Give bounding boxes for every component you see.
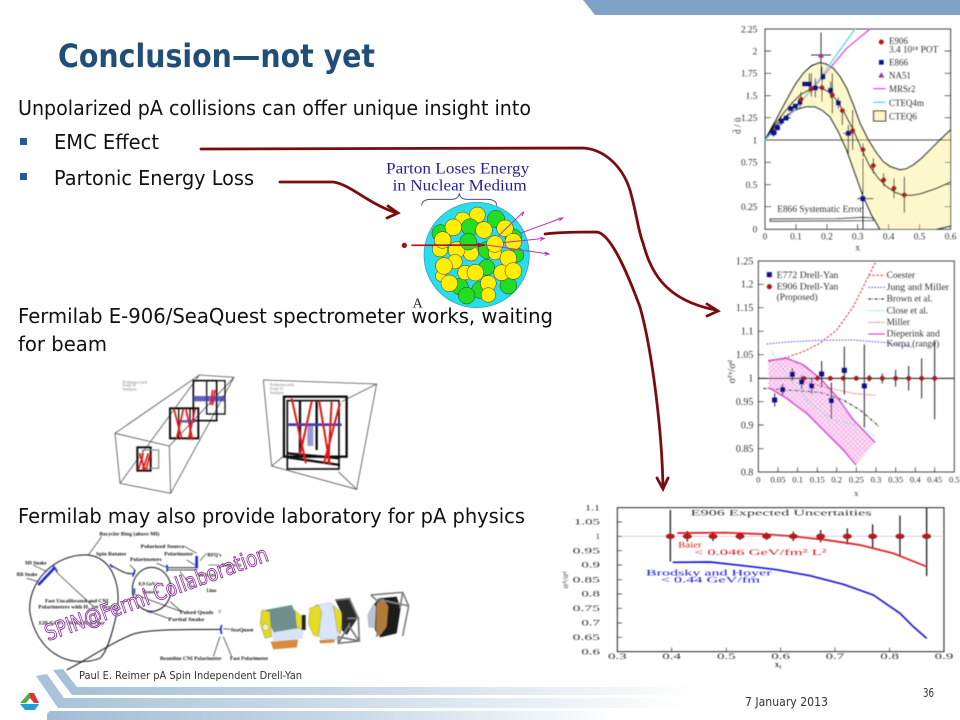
schematic: polarized beam complex: Spin Rotator <box>197 573 217 579</box>
chart: E906 expected uncertainties: Baier <box>678 540 702 550</box>
illustration: parton energy loss nucleus: Parton Loses Energy <box>386 160 529 177</box>
chart: sigma Fe over sigma d: 0.15 <box>810 474 825 484</box>
chart: sigma Fe over sigma d: /σ <box>727 363 738 372</box>
chart: E906 expected uncertainties: d <box>563 571 568 574</box>
chart: sigma Fe over sigma d: x <box>854 488 859 498</box>
chart: sigma Fe over sigma d: 0.45 <box>927 474 942 484</box>
chart: sigma Fe over sigma d: Dieperink and <box>887 330 940 340</box>
schematic: polarized beam complex: Polarimeters <box>130 557 162 563</box>
chart: E906 expected uncertainties: < 0.44 GeV/fm <box>661 574 760 584</box>
chart: d-bar over u-bar ratio: 0.5 <box>914 232 926 242</box>
chart: E906 expected uncertainties: 0.65 <box>573 632 600 642</box>
text block: SeaQuest spectrometer <box>18 304 553 356</box>
chart: sigma Fe over sigma d: (Proposed) <box>777 292 818 303</box>
schematic: polarized beam complex: SeaQuest <box>231 627 253 633</box>
schematic: polarized beam complex: RFQ's <box>207 552 222 558</box>
chart: sigma Fe over sigma d: 1.15 <box>736 303 753 314</box>
footer presenter note: Paul E. Reimer pA Spin Independent Drell-Yan <box>79 669 302 682</box>
schematic: polarized beam complex: 120 GeV/c Main Injector <box>38 620 106 626</box>
chart: E906 expected uncertainties: < 0.046 GeV/fm² L² <box>694 547 827 557</box>
chart: sigma Fe over sigma d: 0.35 <box>888 474 903 484</box>
chart: E906 expected uncertainties: 1.05 <box>574 517 600 527</box>
chart: E906 expected uncertainties: /σ <box>561 573 570 580</box>
chart: sigma Fe over sigma d: 1.05 <box>736 350 753 361</box>
schematic: polarized beam complex: Pulsed Quads <box>180 610 214 616</box>
schematic: polarized beam complex: Recycler Ring (above MI) <box>99 531 159 538</box>
chart: E906 expected uncertainties: 0.95 <box>573 545 600 555</box>
illustration: spectrometer detector views: Event 10 <box>123 384 136 388</box>
chart: E906 expected uncertainties: 0.6 <box>581 646 601 656</box>
title: Conclusion—not yet <box>58 37 375 75</box>
chart: sigma Fe over sigma d: σ <box>727 378 738 383</box>
chart: sigma Fe over sigma d: 0.9 <box>741 420 753 431</box>
chart: sigma Fe over sigma d: 0.4 <box>910 474 921 484</box>
arrow: nucleus to energy loss chart <box>545 232 668 489</box>
chart: sigma Fe over sigma d: Coester <box>887 271 916 281</box>
chart: E906 expected uncertainties: 1 <box>596 531 600 541</box>
chart: sigma Fe over sigma d: Fe <box>727 371 734 378</box>
footer date: 7 January 2013 <box>745 695 828 709</box>
footer bars <box>36 669 700 720</box>
chart: sigma Fe over sigma d: 0.85 <box>736 444 753 455</box>
chart: sigma Fe over sigma d: 1 <box>748 374 753 385</box>
chart: sigma Fe over sigma d: 0.1 <box>792 474 803 484</box>
chart: E906 expected uncertainties: 0.7 <box>581 618 601 628</box>
text block: pA collisions <box>18 96 531 190</box>
illustration: parton energy loss nucleus <box>386 160 563 311</box>
schematic: polarized beam complex: 8.9 GeV/c <box>139 582 160 588</box>
chart: E906 expected uncertainties: 1.1 <box>585 502 600 512</box>
chart: sigma Fe over sigma d: 1.1 <box>741 327 753 338</box>
chart: sigma Fe over sigma d: 0.05 <box>770 474 786 484</box>
chart: d-bar over u-bar ratio: 1.25 <box>741 114 758 124</box>
chart: d-bar over u-bar ratio: NA51 <box>889 71 911 81</box>
chart: sigma Fe over sigma d: E906 Drell-Yan <box>777 283 839 293</box>
chart: d-bar over u-bar ratio: CTEQ6 <box>889 111 917 121</box>
chart: d-bar over u-bar ratio: 0.4 <box>883 232 895 242</box>
chart: E906 expected uncertainties: 0.3 <box>608 651 627 661</box>
schematic: polarized beam complex: ? <box>218 609 221 615</box>
chart: d-bar over u-bar ratio: CTEQ4m <box>889 98 924 108</box>
schematic: polarized beam complex: MI Snake <box>25 560 47 566</box>
chart: sigma Fe over sigma d: Close et al. <box>887 306 928 316</box>
schematic: polarized beam complex: Beamline CNI Polarimeter <box>160 656 222 662</box>
chart: sigma Fe over sigma d: Korpa (range) <box>887 339 939 350</box>
arrow: EMC effect to nuclear ratio chart <box>201 148 718 316</box>
chart: d-bar over u-bar ratio: 0 <box>763 232 768 242</box>
arrow: partonic energy loss to nucleus <box>280 182 398 218</box>
chart: d-bar over u-bar ratio: 0 <box>753 226 758 236</box>
text block: pA physics laboratory: Fermilab may also provide laboratory for pA physics <box>18 504 525 528</box>
chart: E906 expected uncertainties <box>561 502 953 670</box>
icon: Argonne logo <box>20 693 39 710</box>
text block: pA collisions: EMC Effect <box>54 130 159 154</box>
chart: d-bar over u-bar ratio: 0.2 <box>821 232 833 242</box>
chart: d-bar over u-bar ratio: 0.1 <box>790 232 802 242</box>
schematic: polarized beam complex: Partial Snake <box>168 617 205 623</box>
chart: sigma Fe over sigma d: 1.2 <box>741 280 753 291</box>
illustration: spectrometer detector views <box>115 375 377 493</box>
schematic: polarized beam complex: Sources <box>222 562 242 568</box>
illustration: parton energy loss nucleus: A <box>413 296 423 311</box>
chart: sigma Fe over sigma d <box>727 256 960 498</box>
chart: d-bar over u-bar ratio <box>732 25 957 254</box>
schematic: polarized beam complex <box>17 531 269 670</box>
chart: E906 expected uncertainties: E906 Expected Uncertaities <box>691 508 873 518</box>
schematic: polarized beam complex: RR Snake <box>17 572 38 578</box>
chart: E906 expected uncertainties: 0.4 <box>662 651 682 661</box>
illustration: spectrometer detector views: Event 10 <box>270 387 283 391</box>
chart: E906 expected uncertainties: 1 <box>779 665 782 670</box>
text block: pA collisions: Partonic Energy Loss <box>54 166 254 190</box>
chart: sigma Fe over sigma d: 0.5 <box>949 474 960 484</box>
illustration: spectrometer detector views: SeaQuest <box>270 391 284 395</box>
chart: d-bar over u-bar ratio: E906 <box>889 36 908 46</box>
schematic: polarized beam complex: Polarized Source <box>141 544 185 550</box>
chart: sigma Fe over sigma d: E772 Drell-Yan <box>777 271 839 281</box>
callout: SPIN@Fermi Collaboration: SPIN@Fermi Collaboration <box>42 542 272 647</box>
illustration: spectrometer detector views: SeaQuest <box>123 388 136 392</box>
chart: E906 expected uncertainties: 0.9 <box>581 560 600 570</box>
illustration: SeaQuest magnets <box>260 592 409 649</box>
text block: SeaQuest spectrometer: for beam <box>18 332 107 356</box>
chart: sigma Fe over sigma d: 0.25 <box>849 474 864 484</box>
chart: E906 expected uncertainties: A <box>563 580 568 584</box>
chart: sigma Fe over sigma d: 0.3 <box>871 474 881 484</box>
chart: sigma Fe over sigma d: d <box>727 359 734 363</box>
text block: pA collisions: Unpolarized pA collisions can offer unique insight into <box>18 96 531 120</box>
chart: d-bar over u-bar ratio: 0.5 <box>746 181 758 191</box>
chart: E906 expected uncertainties: σ <box>561 584 570 588</box>
schematic: polarized beam complex: Linac <box>207 588 217 594</box>
chart: d-bar over u-bar ratio: 0.25 <box>741 203 758 213</box>
illustration: spectrometer detector views: Production track <box>123 380 147 384</box>
chart: E906 expected uncertainties: 0.7 <box>826 651 845 661</box>
chart: E906 expected uncertainties: 0.8 <box>880 651 899 661</box>
chart: d-bar over u-bar ratio: MRSr2 <box>889 84 915 94</box>
chart: d-bar over u-bar ratio: 1 <box>753 136 758 146</box>
chart: E906 expected uncertainties: 0.85 <box>573 574 600 584</box>
page number: 36 <box>923 686 934 700</box>
chart: sigma Fe over sigma d: 0.95 <box>736 397 753 408</box>
schematic: polarized beam complex: Polarimeters with H₂ Jet Target <box>38 604 116 610</box>
chart: d-bar over u-bar ratio: 0.3 <box>852 232 864 242</box>
chart: sigma Fe over sigma d: Brown et al. <box>887 295 933 305</box>
chart: sigma Fe over sigma d: 0 <box>756 474 760 484</box>
chart: d-bar over u-bar ratio: 2 <box>753 47 758 57</box>
chart: d-bar over u-bar ratio: d̄ / ū <box>732 117 744 134</box>
schematic: polarized beam complex: Spin Rotator <box>96 551 127 557</box>
chart: d-bar over u-bar ratio: x <box>855 244 860 254</box>
chart: E906 expected uncertainties: 0.5 <box>717 651 736 661</box>
schematic: polarized beam complex: Polarimeter <box>164 552 194 558</box>
chart: sigma Fe over sigma d: 0.2 <box>831 474 842 484</box>
chart: sigma Fe over sigma d: Miller <box>887 318 911 328</box>
illustration: spectrometer detector views: Production track <box>270 383 294 387</box>
chart: E906 expected uncertainties: 0.9 <box>935 651 953 661</box>
schematic: polarized beam complex: Fast Polarimeter <box>230 656 269 662</box>
chart: sigma Fe over sigma d: Jung and Miller <box>887 283 950 293</box>
chart: E906 expected uncertainties: 0.8 <box>581 589 600 599</box>
chart: d-bar over u-bar ratio: 1.5 <box>746 92 758 102</box>
text block: SeaQuest spectrometer: Fermilab E-906/SeaQuest spectrometer works, waiting <box>18 304 553 328</box>
chart: E906 expected uncertainties: Brodsky and Hoyer <box>646 567 772 577</box>
chart: d-bar over u-bar ratio: 1.75 <box>741 70 758 80</box>
chart: d-bar over u-bar ratio: 0.6 <box>945 232 957 242</box>
chart: d-bar over u-bar ratio: 2.25 <box>741 25 758 35</box>
chart: sigma Fe over sigma d: 1.25 <box>736 256 753 267</box>
schematic: polarized beam complex: Fast Uncalibrated and CNI <box>45 598 109 604</box>
top banner bar <box>583 0 960 15</box>
chart: E906 expected uncertainties: 0.6 <box>771 651 791 661</box>
chart: E906 expected uncertainties: x <box>775 660 779 669</box>
illustration: parton energy loss nucleus: in Nuclear Medium <box>393 178 527 195</box>
chart: d-bar over u-bar ratio: 3.4 10¹⁸ POT <box>889 44 939 54</box>
chart: E906 expected uncertainties: 0.75 <box>573 603 600 613</box>
chart: d-bar over u-bar ratio: E866 Systematic Error <box>777 204 862 214</box>
chart: d-bar over u-bar ratio: E866 <box>889 58 908 68</box>
schematic: polarized beam complex: Booster <box>143 589 160 595</box>
chart: sigma Fe over sigma d: 0.8 <box>741 467 753 478</box>
chart: d-bar over u-bar ratio: 0.75 <box>741 159 758 169</box>
